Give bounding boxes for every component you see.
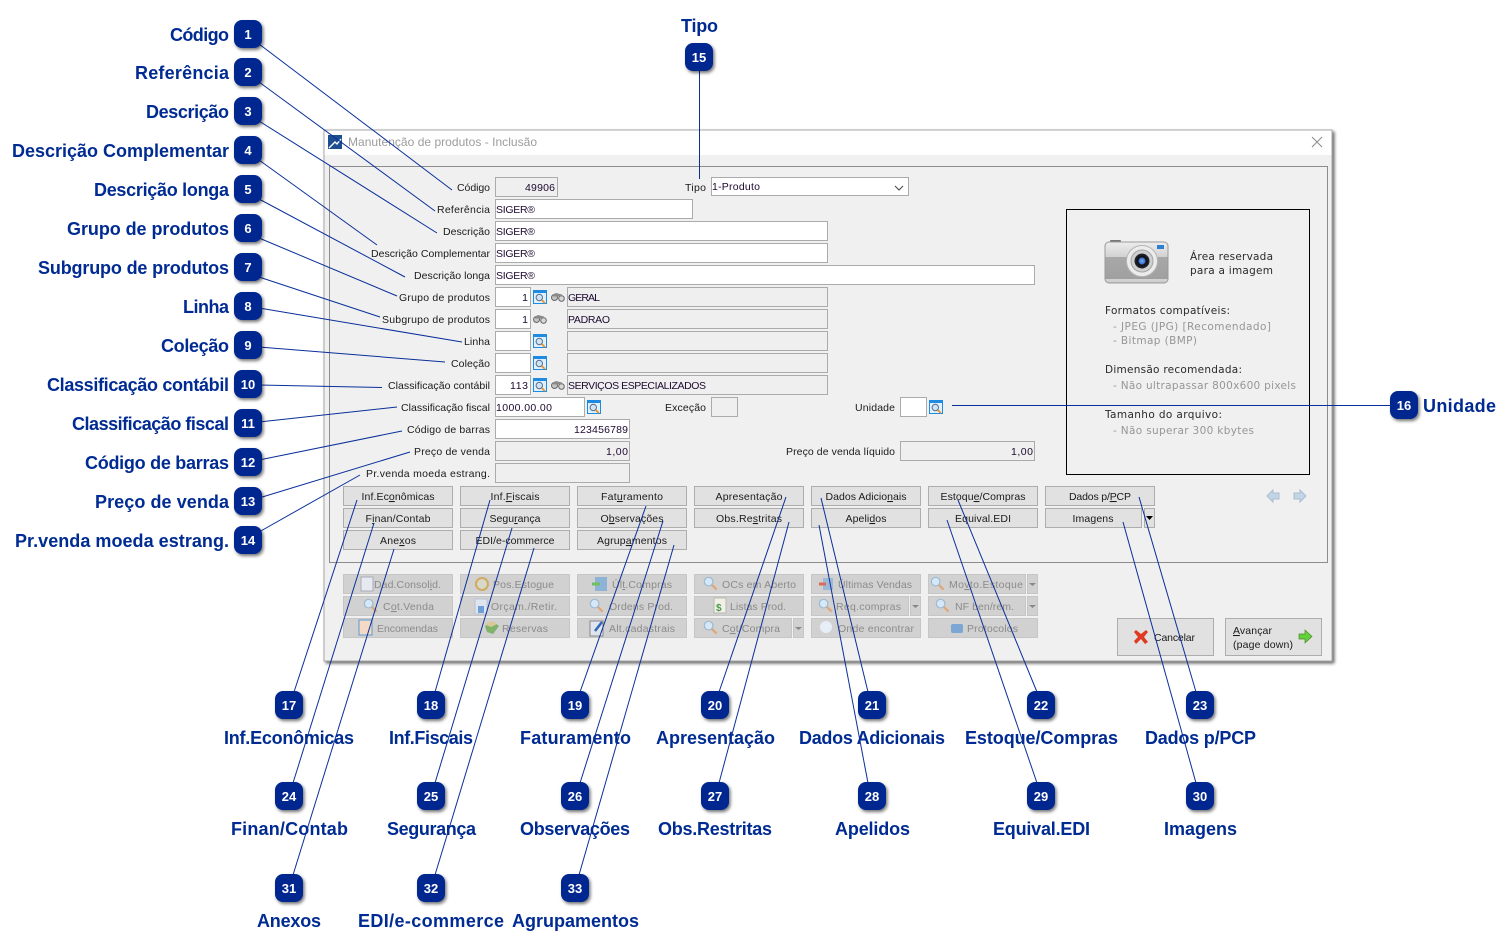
callout 28: Apelidos: 28: [865, 789, 879, 804]
form field labels: [366, 182, 895, 480]
callout 27: Obs.Restritas: [658, 522, 789, 839]
callout 25: Segurança: [387, 528, 512, 839]
form input fields: 1,00: [606, 446, 628, 458]
callout 13: Preço de venda: Preço de venda: [95, 492, 230, 512]
callout 24: Finan/Contab: [231, 523, 374, 839]
callout 9: Coleção: 9: [244, 338, 252, 353]
form field labels: Grupo de produtos: [399, 292, 490, 304]
disabled shortcut buttons: Reservas: [502, 623, 548, 635]
callout 23: Dados p/PCP: Dados p/PCP: [1145, 728, 1256, 748]
image guidance text: - JPEG (JPG) [Recomendado]: [1113, 321, 1271, 333]
callout 14: Pr.venda moeda estrang.: 14: [241, 533, 256, 548]
callout 13: Preço de venda: [95, 452, 410, 515]
callout 14: Pr.venda moeda estrang.: [15, 475, 360, 554]
callout 23: Dados p/PCP: 23: [1193, 698, 1207, 713]
form field labels: Referência: [437, 204, 490, 216]
disabled shortcut buttons: Encomendas: [377, 623, 438, 635]
callout 20: Apresentação: Apresentação: [656, 728, 775, 748]
callout 16: Unidade: [952, 391, 1496, 419]
callout 33: Agrupamentos: 33: [568, 881, 582, 896]
form field labels: Subgrupo de produtos: [382, 314, 490, 326]
callout 22: Estoque/Compras: [958, 500, 1118, 748]
callout 18: Inf.Fiscais: 18: [424, 698, 438, 713]
tab buttons: Observações: [600, 513, 664, 525]
callout 26: Observações: 26: [568, 789, 582, 804]
callout 25: Segurança: Segurança: [387, 819, 477, 839]
form field labels: Tipo: [685, 182, 706, 194]
callout 26: Observações: [520, 521, 663, 839]
callout 9: Coleção: Coleção: [161, 336, 229, 356]
form field labels: Descrição: [443, 226, 490, 238]
callout 27: Obs.Restritas: Obs.Restritas: [658, 819, 772, 839]
callout 6: Grupo de produtos: Grupo de produtos: [67, 219, 229, 239]
disabled shortcut buttons: [344, 574, 1038, 638]
disabled shortcut buttons: Pos.Estoque: [493, 579, 554, 591]
tab buttons: Finan/Contab: [366, 513, 431, 525]
image guidance text: Área reservada: [1190, 250, 1273, 263]
callout 1: Código: Código: [170, 25, 229, 45]
form input fields: 49906: [525, 182, 555, 194]
callout 7: Subgrupo de produtos: Subgrupo de produtos: [38, 258, 229, 278]
callout 16: Unidade: Unidade: [1423, 396, 1496, 416]
form panel: [330, 166, 1328, 562]
form field labels: Preço de venda líquido: [786, 446, 895, 458]
callout 24: Finan/Contab: Finan/Contab: [231, 819, 348, 839]
disabled shortcut buttons: OCs em Aberto: [722, 579, 796, 591]
callout 25: Segurança: 25: [424, 789, 438, 804]
tab buttons: Estoque/Compras: [940, 491, 1026, 503]
callout 8: Linha: Linha: [183, 297, 230, 317]
form input fields: 1: [522, 292, 528, 304]
form input fields: 1000.00.00: [496, 402, 552, 414]
cancel button: Cancelar: [1154, 632, 1196, 644]
disabled shortcut buttons: Alt.cadastrais: [609, 623, 675, 635]
image guidance text: para a imagem: [1190, 265, 1273, 277]
image guidance text: Dimensão recomendada:: [1105, 364, 1242, 376]
icon: navigation arrows: [1267, 490, 1306, 502]
callout 5: Descrição longa: [94, 175, 405, 277]
callout 4: Descrição Complementar: Descrição Complementar: [12, 141, 229, 161]
callout 18: Inf.Fiscais: [389, 500, 490, 748]
callout 3: Descrição: [146, 97, 437, 233]
tab buttons: Inf.Econômicas: [362, 491, 434, 503]
callout 9: Coleção: [161, 331, 445, 362]
callout 18: Inf.Fiscais: Inf.Fiscais: [389, 728, 473, 748]
callout 31: Anexos: Anexos: [257, 911, 321, 931]
callout 8: Linha: 8: [244, 299, 252, 314]
form field labels: Linha: [464, 336, 490, 348]
tab buttons: [344, 486, 1154, 550]
callout 2: Referência: 2: [244, 65, 252, 80]
callout 2: Referência: Referência: [135, 63, 230, 83]
callout 13: Preço de venda: 13: [241, 494, 255, 509]
disabled shortcut buttons: Orçam./Retir.: [491, 601, 557, 613]
callout 5: Descrição longa: Descrição longa: [94, 180, 230, 200]
disabled shortcut buttons: Listas Prod.: [730, 601, 786, 613]
form field labels: Classificação fiscal: [401, 402, 490, 414]
dialog window: [324, 130, 1332, 661]
callout 1: Código: 1: [244, 27, 252, 42]
disabled shortcut buttons: Protocolos: [967, 623, 1018, 635]
form input fields: [496, 178, 1034, 482]
disabled shortcut buttons: Ordens Prod.: [609, 601, 673, 613]
image guidance text: - Bitmap (BMP): [1113, 335, 1197, 347]
callout 12: Código de barras: [85, 431, 402, 476]
tab buttons: Inf.Fiscais: [490, 491, 540, 503]
advance button: [1226, 618, 1322, 656]
callout 7: Subgrupo de produtos: 7: [244, 260, 252, 275]
callout 20: Apresentação: 20: [708, 698, 722, 713]
tab buttons: Anexos: [380, 535, 416, 547]
callout 21: Dados Adicionais: 21: [865, 698, 879, 713]
title bar: Manutenção de produtos - Inclusão: [348, 135, 537, 149]
callout 30: Imagens: 30: [1193, 789, 1207, 804]
callout 32: EDI/e-commerce: [358, 548, 534, 931]
callout 3: Descrição: 3: [244, 104, 252, 119]
form input fields: 1,00: [1011, 446, 1033, 458]
callout 17: Inf.Econômicas: [224, 500, 357, 748]
callout 17: Inf.Econômicas: 17: [282, 698, 296, 713]
form field labels: Descrição Complementar: [371, 248, 490, 260]
form input fields: 1-Produto: [712, 181, 760, 193]
form input fields: SIGER®: [496, 226, 535, 238]
form field labels: Código de barras: [407, 424, 490, 436]
callout 6: Grupo de produtos: 6: [244, 221, 252, 236]
form input fields: GERAL: [568, 292, 600, 304]
callout 29: Equival.EDI: Equival.EDI: [993, 819, 1090, 839]
callout 6: Grupo de produtos: [67, 214, 397, 296]
callout 14: Pr.venda moeda estrang.: Pr.venda moeda estrang.: [15, 531, 229, 551]
callout 29: Equival.EDI: [947, 520, 1090, 839]
form field labels: Exceção: [665, 402, 706, 414]
disabled shortcut buttons: Onde encontrar: [838, 623, 914, 635]
disabled shortcut buttons: Dad.Consolid.: [374, 579, 441, 591]
callout 26: Observações: Observações: [520, 819, 630, 839]
callout 32: EDI/e-commerce: 32: [424, 881, 438, 896]
callout 5: Descrição longa: 5: [244, 182, 252, 197]
icon: camera: [1105, 240, 1168, 283]
callout 21: Dados Adicionais: Dados Adicionais: [799, 728, 945, 748]
form field labels: Classificação contábil: [388, 380, 490, 392]
callout 8: Linha: [183, 292, 462, 342]
callout 10: Classificação contábil: 10: [241, 377, 255, 392]
callout 1: Código: [170, 20, 452, 190]
callout 19: Faturamento: Faturamento: [520, 728, 631, 748]
tab buttons: EDI/e-commerce: [476, 535, 555, 547]
callout 29: Equival.EDI: 29: [1034, 789, 1048, 804]
image guidance text: - Não superar 300 kbytes: [1113, 425, 1254, 437]
callout 11: Classificação fiscal: [72, 407, 397, 437]
callout 24: Finan/Contab: 24: [282, 789, 297, 804]
callout 15: Tipo: 15: [692, 50, 706, 65]
disabled shortcut buttons: $: [716, 603, 722, 614]
callout 15: Tipo: Tipo: [681, 16, 718, 36]
form input fields: SIGER®: [496, 204, 535, 216]
disabled shortcut buttons: Req.compras: [836, 601, 901, 613]
callout 10: Classificação contábil: [47, 370, 382, 398]
callout 22: Estoque/Compras: Estoque/Compras: [965, 728, 1118, 748]
icon: green arrow: [1299, 630, 1312, 643]
image guidance text: - Não ultrapassar 800x600 pixels: [1113, 380, 1296, 392]
form input fields: SIGER®: [496, 270, 535, 282]
callout 4: Descrição Complementar: 4: [244, 143, 252, 158]
callout 19: Faturamento: [520, 506, 646, 748]
tab buttons: Segurança: [490, 513, 541, 525]
callout 11: Classificação fiscal: 11: [241, 416, 255, 431]
callout 12: Código de barras: 12: [241, 455, 255, 470]
callout 2: Referência: [135, 58, 435, 211]
form input fields: PADRAO: [568, 314, 610, 326]
callout 30: Imagens: Imagens: [1164, 819, 1237, 839]
callout 15: Tipo: [681, 16, 718, 179]
disabled shortcut buttons: Cot.Venda: [383, 601, 434, 613]
callout 4: Descrição Complementar: [12, 136, 377, 245]
tab buttons: Faturamento: [601, 491, 663, 503]
image guidance text: Formatos compatíveis:: [1105, 305, 1230, 317]
callout 10: Classificação contábil: Classificação contábil: [47, 375, 229, 395]
disabled shortcut buttons: Movto.Estoque: [949, 579, 1023, 591]
tab buttons: Dados Adicionais: [826, 491, 906, 503]
form field labels: Código: [457, 182, 490, 194]
callout 12: Código de barras: Código de barras: [85, 453, 229, 473]
callout 31: Anexos: [257, 549, 394, 931]
tab buttons: Apresentação: [716, 491, 783, 503]
callout 27: Obs.Restritas: 27: [708, 789, 722, 804]
callout 33: Agrupamentos: [512, 545, 674, 931]
form input fields: 113: [510, 380, 528, 392]
image reservation box: [1066, 210, 1310, 474]
form field labels: Descrição longa: [414, 270, 490, 282]
form input fields: SERVIÇOS ESPECIALIZADOS: [568, 380, 706, 392]
disabled shortcut buttons: Últimas Vendas: [838, 578, 912, 591]
callout 28: Apelidos: Apelidos: [835, 819, 910, 839]
callout 11: Classificação fiscal: Classificação fiscal: [72, 414, 229, 434]
advance button: Avançar: [1233, 625, 1272, 637]
cancel button: [1118, 618, 1214, 656]
callout 28: Apelidos: [819, 525, 910, 839]
disabled shortcut buttons: Últ.Compras: [612, 578, 672, 591]
callout 31: Anexos: 31: [282, 881, 296, 896]
callout 7: Subgrupo de produtos: [38, 253, 380, 317]
tab buttons: Apelidos: [846, 513, 886, 525]
form field labels: Preço de venda: [414, 446, 490, 458]
form input fields: 123456789: [574, 424, 628, 436]
tab buttons: Equival.EDI: [955, 513, 1011, 525]
image guidance text: Tamanho do arquivo:: [1104, 409, 1222, 421]
disabled shortcut buttons: NF ben/rem.: [955, 601, 1014, 613]
tab buttons: Agrupamentos: [597, 535, 667, 547]
form field labels: Pr.venda moeda estrang.: [366, 468, 490, 480]
callout 22: Estoque/Compras: 22: [1034, 698, 1048, 713]
tab buttons: Imagens: [1072, 513, 1114, 525]
form field labels: Coleção: [451, 358, 490, 370]
title bar: [324, 130, 1332, 155]
callout 3: Descrição: Descrição: [146, 102, 229, 122]
callout 23: Dados p/PCP: [1139, 497, 1256, 748]
form input fields: 1: [522, 314, 528, 326]
tab buttons: Dados p/PCP: [1069, 491, 1131, 503]
icon: red X: [1134, 630, 1148, 644]
tab buttons: Obs.Restritas: [716, 513, 782, 525]
callout 19: Faturamento: 19: [568, 698, 582, 713]
callout 21: Dados Adicionais: [799, 498, 945, 748]
advance button: (page down): [1233, 639, 1293, 651]
form field labels: Unidade: [855, 402, 895, 414]
callout 20: Apresentação: [656, 497, 786, 748]
disabled shortcut buttons: Cot/Compra: [722, 623, 780, 635]
callout 16: Unidade: 16: [1397, 398, 1411, 413]
callout 30: Imagens: [1123, 522, 1237, 839]
callout 32: EDI/e-commerce: EDI/e-commerce: [358, 911, 504, 931]
form input fields: SIGER®: [496, 248, 535, 260]
image guidance text: [1104, 250, 1296, 437]
callout 33: Agrupamentos: Agrupamentos: [512, 911, 639, 931]
callout 17: Inf.Econômicas: Inf.Econômicas: [224, 728, 354, 748]
